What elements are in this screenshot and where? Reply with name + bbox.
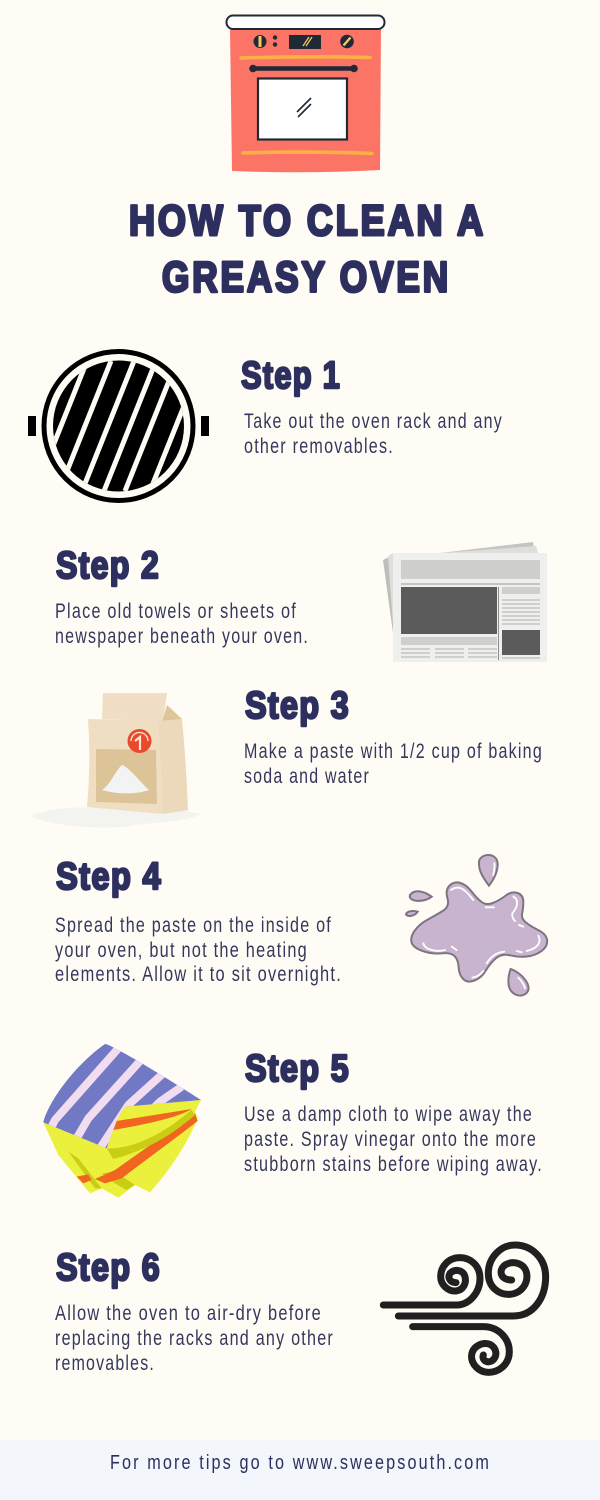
text block: replacing the racks and any other <box>55 1327 334 1350</box>
text block: Place old towels or sheets of <box>55 600 297 623</box>
text block <box>55 600 309 648</box>
panel: step 2 <box>55 542 547 662</box>
icon: oven rack <box>28 352 209 500</box>
panel: step 3 <box>30 685 543 828</box>
panel: step 5 <box>43 1044 543 1198</box>
icon: newspaper <box>383 542 547 662</box>
text block <box>244 410 503 458</box>
text block: Allow the oven to air-dry before <box>55 1302 322 1325</box>
footer: For more tips go to www.sweepsouth.com <box>110 1452 491 1474</box>
heading: Step 2 <box>56 545 160 587</box>
text block: removables. <box>55 1352 155 1375</box>
icon: oven <box>226 16 384 172</box>
heading: Step 5 <box>245 1048 350 1090</box>
icon: cleaning cloths <box>43 1044 201 1198</box>
text block: Spread the paste on the inside of <box>55 914 332 937</box>
heading: Step 3 <box>245 685 350 727</box>
heading: Step 1 <box>241 355 341 397</box>
text block <box>55 914 342 986</box>
text block: elements. Allow it to sit overnight. <box>55 963 342 986</box>
text block: your oven, but not the heating <box>55 939 308 962</box>
panel: step 6 <box>55 1245 546 1375</box>
text block <box>55 1302 334 1375</box>
panel: step 4 <box>55 855 547 996</box>
title: HOW TO CLEAN A <box>129 197 486 245</box>
heading: Step 6 <box>56 1247 161 1289</box>
icon: baking soda bag <box>30 693 200 828</box>
footer <box>0 1440 600 1500</box>
text block: soda and water <box>244 765 370 788</box>
text block <box>244 1103 543 1176</box>
text block: other removables. <box>244 435 394 458</box>
text block <box>244 740 543 788</box>
panel: step 1 <box>28 352 503 500</box>
text block: Take out the oven rack and any <box>244 410 503 433</box>
icon: paste splat <box>406 855 547 996</box>
title <box>129 197 486 302</box>
title: GREASY OVEN <box>162 254 451 302</box>
icon: wind <box>383 1245 546 1372</box>
heading: Step 4 <box>56 856 162 898</box>
text block: newspaper beneath your oven. <box>55 625 309 648</box>
